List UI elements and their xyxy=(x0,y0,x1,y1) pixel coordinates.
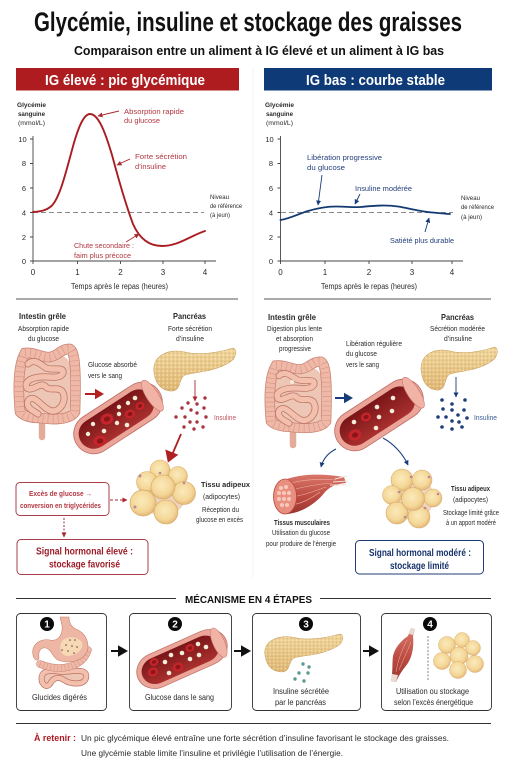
reference level label: (à jeun) xyxy=(461,215,482,221)
chart: low GI glycemia: 0 xyxy=(278,268,283,277)
adipose tissue label: (adipocytes) xyxy=(453,495,488,504)
icon: small intestine xyxy=(19,349,75,437)
annotation: insulin xyxy=(117,152,187,171)
callout: excess glucose: Excès de glucose → xyxy=(29,489,92,498)
y axis title: Glycémie xyxy=(265,102,294,109)
section heading: 4 steps: MÉCANISME EN 4 ÉTAPES xyxy=(185,593,312,606)
adipose tissue label: Réception du xyxy=(202,505,239,514)
annotation: progressive release xyxy=(307,153,382,205)
arrow: step 1 to 2 xyxy=(111,647,126,655)
arrow: step 2 to 3 xyxy=(234,647,249,655)
separator lines xyxy=(16,298,491,300)
regular release label: vers le sang xyxy=(346,360,379,369)
chart: low GI glycemia: 3 xyxy=(410,268,415,277)
annotation: secondary drop xyxy=(74,234,139,260)
callout: excess glucose xyxy=(16,482,109,516)
chart: low GI glycemia xyxy=(265,102,495,291)
arrow: pancreas to insulin xyxy=(455,377,457,397)
arrow: step 3 to 4 xyxy=(363,647,377,655)
adipose tissue label: Tissu adipeux xyxy=(451,484,491,493)
small intestine label: Intestin grêle xyxy=(19,311,66,321)
icon: blood vessel xyxy=(66,375,170,461)
adipose tissue label: à un apport modéré xyxy=(446,518,496,527)
small intestine label: progressive xyxy=(279,344,311,353)
small intestine label: et absorption xyxy=(276,334,313,343)
chart: low GI glycemia: 2 xyxy=(269,233,273,242)
chart: high GI glycemia: 0 xyxy=(31,268,36,277)
icon: stomach and intestines xyxy=(33,617,88,686)
regular release label: Libération régulière xyxy=(346,339,402,348)
icon: adipocytes xyxy=(382,469,442,528)
annotation: satiety: Satiété plus durable xyxy=(390,236,454,245)
callout: moderate hormonal signal: stockage limité xyxy=(390,561,449,572)
chart: low GI glycemia: 2 xyxy=(367,268,372,277)
icon: pancreas xyxy=(421,347,497,390)
small intestine label xyxy=(18,311,69,343)
muscle label: pour produire de l’énergie xyxy=(266,539,336,548)
chart: high GI glycemia: 1 xyxy=(75,268,80,277)
adipose tissue label xyxy=(443,484,499,527)
callout: moderate hormonal signal: Signal hormonal modéré : xyxy=(369,548,471,559)
step 4: use or storage xyxy=(382,614,492,710)
step 1: carbohydrates digested xyxy=(16,614,106,710)
y axis title xyxy=(17,102,46,127)
adipose tissue label: glucose en excès xyxy=(196,515,243,524)
step 2: glucose in blood: Glucose dans le sang xyxy=(145,693,214,702)
reference level label: de référence xyxy=(461,205,495,211)
annotation: progressive release: Libération progressive xyxy=(307,153,382,162)
muscle label: Utilisation du glucose xyxy=(272,528,330,537)
callout: high hormonal signal xyxy=(17,540,148,574)
y axis title: Glycémie xyxy=(17,102,46,109)
step 3: insulin secreted: par le pancréas xyxy=(275,698,326,707)
y axis title: (mmol/L) xyxy=(266,120,293,127)
small intestine label: Intestin grêle xyxy=(268,312,316,322)
annotation: absorption: Absorption rapide xyxy=(124,107,184,116)
muscle label xyxy=(266,518,336,548)
footer divider xyxy=(16,722,491,724)
chart: high GI glycemia: 2 xyxy=(118,268,123,277)
insulin label: Insuline xyxy=(474,413,497,422)
arrow: intestine to blood xyxy=(85,390,102,398)
pancreas label: d’insuline xyxy=(176,334,204,343)
reference level label: Niveau xyxy=(461,196,480,202)
small intestine label xyxy=(267,312,322,353)
y axis title: sanguine xyxy=(266,111,293,118)
icon: pancreas xyxy=(154,348,236,391)
icon: adipocytes xyxy=(434,632,484,678)
panel: high GI pathway xyxy=(16,311,251,574)
icon: blood vessel xyxy=(327,372,431,458)
adipose tissue label: (adipocytes) xyxy=(203,492,240,501)
annotation: absorption: du glucose xyxy=(124,116,160,125)
callout: high hormonal signal: stockage favorisé xyxy=(49,560,120,570)
chart: high GI glycemia: 8 xyxy=(22,159,26,168)
annotation: insulin: d’insuline xyxy=(135,162,166,171)
step 3: insulin secreted: 3 xyxy=(303,620,309,630)
chart: low GI glycemia: Temps après le repas (heures) xyxy=(321,282,417,291)
arrow: intestine to blood xyxy=(335,394,351,402)
key takeaway: Une glycémie stable limite l’insuline et privilégie l’utilisation de l’énergie. xyxy=(81,748,343,758)
chart: low GI glycemia: 1 xyxy=(323,268,328,277)
adipose tissue label: Tissu adipeux xyxy=(201,480,251,489)
absorbed glucose label: vers le sang xyxy=(88,371,122,380)
panel: low GI pathway xyxy=(266,312,499,574)
chart: high GI glycemia: 0 xyxy=(22,257,26,266)
pancreas label xyxy=(168,311,212,343)
chart: low GI glycemia: 10 xyxy=(265,135,274,144)
pancreas label xyxy=(430,312,485,343)
absorbed glucose label xyxy=(88,360,137,380)
reference level label xyxy=(461,196,495,221)
chart: low GI glycemia: 4 xyxy=(450,268,455,277)
arrow: pancreas to insulin xyxy=(194,380,196,401)
step 1: carbohydrates digested: Glucides digérés xyxy=(32,693,87,702)
icon: pancreas xyxy=(265,634,343,672)
chart: high GI glycemia: 4 xyxy=(203,268,208,277)
chart: high GI glycemia: 10 xyxy=(18,135,27,144)
step 4: use or storage: 4 xyxy=(427,620,433,630)
pancreas label: Sécrétion modérée xyxy=(430,324,485,333)
callout: high hormonal signal: Signal hormonal élevé : xyxy=(36,546,133,558)
icon: muscle xyxy=(391,628,415,682)
icon: muscle xyxy=(274,475,348,514)
step 4: use or storage: selon l’excès énergétique xyxy=(394,698,473,707)
chart: high GI glycemia: 6 xyxy=(22,184,26,193)
annotation: moderate insulin: Insuline modérée xyxy=(355,184,412,193)
pancreas label: Forte sécrétion xyxy=(168,324,212,333)
annotation: secondary drop: faim plus précoce xyxy=(74,251,131,260)
panel: low GI header: IG bas : courbe stable xyxy=(306,72,445,89)
annotation: progressive release: du glucose xyxy=(307,163,345,172)
reference level label xyxy=(210,195,243,219)
chart: high GI glycemia: 4 xyxy=(22,208,26,218)
panel: high GI header xyxy=(16,68,239,90)
chart: high GI glycemia xyxy=(17,102,243,291)
arrow: blood to fat xyxy=(383,438,408,465)
high GI curve xyxy=(33,114,205,246)
pancreas label: d’insuline xyxy=(444,334,472,343)
reference level label: (à jeun) xyxy=(210,213,230,219)
callout: excess glucose: conversion en triglycérides xyxy=(20,501,101,510)
step 2: glucose in blood: 2 xyxy=(172,620,178,630)
small intestine label: Absorption rapide xyxy=(18,324,69,333)
chart: low GI glycemia: 8 xyxy=(269,159,273,168)
annotation: satiety xyxy=(390,218,454,245)
chart: low GI glycemia: 6 xyxy=(269,184,273,193)
arrow: dashed to hormonal signal xyxy=(63,518,65,537)
key takeaway: À retenir : xyxy=(34,733,76,743)
key takeaway xyxy=(34,733,449,758)
panel divider xyxy=(252,68,254,578)
reference level label: Niveau xyxy=(210,195,229,201)
absorbed glucose label: Glucose absorbé xyxy=(88,360,137,369)
pancreas label: Pancréas xyxy=(441,312,474,322)
step 3: insulin secreted xyxy=(252,614,360,710)
icon: insulin dots xyxy=(174,396,208,431)
low GI curve xyxy=(280,206,450,220)
annotation: moderate insulin xyxy=(355,184,412,204)
step 4: use or storage: Utilisation ou stockage xyxy=(396,687,469,696)
chart: low GI glycemia: 0 xyxy=(269,257,273,266)
icon: blood vessel xyxy=(131,623,233,695)
adipose tissue label xyxy=(196,480,251,524)
insulin label: Insuline xyxy=(214,413,236,422)
icon: adipocytes xyxy=(130,460,196,524)
icon: insulin dots xyxy=(293,662,311,683)
y axis title xyxy=(265,102,294,127)
muscle label: Tissus musculaires xyxy=(274,518,330,527)
icon: small intestine xyxy=(270,361,326,445)
pancreas label: Pancréas xyxy=(173,311,206,321)
panel: high GI header: IG élevé : pic glycémique xyxy=(45,72,205,89)
panel: low GI header xyxy=(264,68,492,90)
annotation: absorption xyxy=(98,107,184,125)
key takeaway: Un pic glycémique élevé entraîne une forte sécrétion d’insuline favorisant le stockage des graisses. xyxy=(81,733,449,743)
annotation: insulin: Forte sécrétion xyxy=(135,152,187,161)
arrow: blood to muscle xyxy=(321,449,336,467)
subtitle: Comparaison entre un aliment à IG élevé et un aliment à IG bas xyxy=(74,43,444,58)
small intestine label: Digestion plus lente xyxy=(267,324,322,333)
icon: insulin dots xyxy=(436,398,469,431)
chart: high GI glycemia: 2 xyxy=(22,233,26,242)
regular release label xyxy=(346,339,402,369)
reference level label: de référence xyxy=(210,204,243,210)
small intestine label: du glucose xyxy=(28,334,59,343)
step 1: carbohydrates digested: 1 xyxy=(44,620,50,630)
arrow: insulin to fat tissue xyxy=(166,434,181,461)
step 2: glucose in blood xyxy=(130,614,233,710)
chart: high GI glycemia: Temps après le repas (heures) xyxy=(71,282,168,291)
y axis title: sanguine xyxy=(18,111,45,118)
y axis title: (mmol/L) xyxy=(18,120,45,127)
arrow: dashed to adipocytes xyxy=(110,499,127,501)
chart: high GI glycemia: 3 xyxy=(161,268,166,277)
annotation: secondary drop: Chute secondaire : xyxy=(74,241,134,250)
callout: moderate hormonal signal xyxy=(356,540,484,574)
step 3: insulin secreted: Insuline sécrétée xyxy=(273,687,330,696)
regular release label: du glucose xyxy=(346,349,377,358)
chart: low GI glycemia: 4 xyxy=(269,208,273,218)
